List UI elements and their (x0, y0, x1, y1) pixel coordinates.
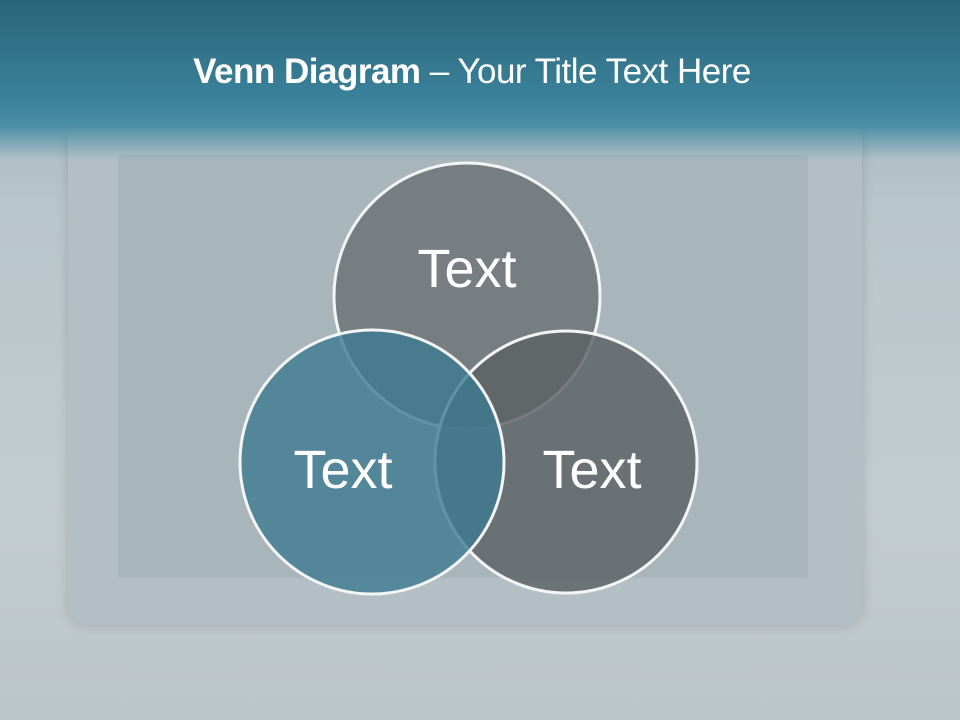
title: Venn Diagram – Your Title Text Here (193, 52, 751, 91)
circle: right: Text (542, 440, 642, 500)
circle: left: Text (293, 440, 393, 500)
circle: top (334, 163, 600, 429)
tablet screen (118, 155, 808, 578)
circle: top: Text (417, 239, 517, 299)
circle: left (240, 330, 504, 594)
circle: right (435, 331, 697, 593)
header band (0, 0, 960, 160)
tablet background (68, 120, 862, 625)
